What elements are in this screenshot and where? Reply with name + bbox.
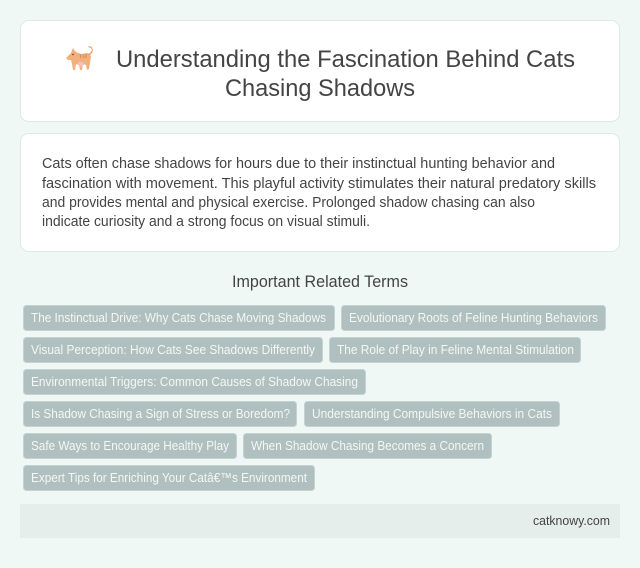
title: Understanding the Fascination Behind Cats	[116, 46, 575, 73]
tag 4: The Role of Play in Feline Mental Stimulation	[337, 342, 574, 357]
footer: catknowy.com	[533, 513, 610, 528]
panel: intro text: and provides mental and physical exercise. Prolonged shadow chasing can also	[42, 194, 535, 211]
tag 1: The Instinctual Drive: Why Cats Chase Moving Shadows	[31, 310, 326, 325]
tag 6: Is Shadow Chasing a Sign of Stress or Boredom?	[31, 406, 290, 421]
icon: cat	[66, 46, 93, 70]
tag 9: When Shadow Chasing Becomes a Concern	[251, 438, 484, 453]
footer	[20, 504, 620, 538]
panel: intro text: fascination with movement. This playful activity stimulates their natural predatory skills	[42, 175, 596, 192]
tag 4	[330, 338, 580, 362]
tag 3: Visual Perception: How Cats See Shadows Differently	[31, 342, 316, 357]
tag 2: Evolutionary Roots of Feline Hunting Behaviors	[349, 310, 598, 325]
title: Chasing Shadows	[225, 75, 415, 102]
tag 8: Safe Ways to Encourage Healthy Play	[31, 438, 230, 453]
tag 5: Environmental Triggers: Common Causes of Shadow Chasing	[31, 374, 358, 389]
tag 8	[24, 434, 236, 458]
tag 7	[304, 402, 560, 426]
tag 3	[24, 338, 322, 362]
tag 10: Expert Tips for Enriching Your Catâ€™s Environment	[31, 470, 307, 485]
tag list	[24, 306, 606, 490]
panel: intro text: Cats often chase shadows for hours due to their instinctual hunting behavior and	[42, 155, 555, 172]
tag 5	[24, 370, 366, 394]
panel: intro text	[20, 134, 620, 252]
title	[116, 46, 575, 102]
tag 1	[24, 306, 334, 330]
heading: related terms: Important Related Terms	[232, 273, 408, 291]
tag 9	[244, 434, 492, 458]
tag 7: Understanding Compulsive Behaviors in Cats	[312, 406, 552, 421]
tag 6	[24, 402, 296, 426]
tag 2	[342, 306, 606, 330]
tag 10	[24, 466, 314, 490]
panel: title card	[20, 20, 620, 122]
panel: intro text: indicate curiosity and a strong focus on visual stimuli.	[42, 213, 370, 230]
